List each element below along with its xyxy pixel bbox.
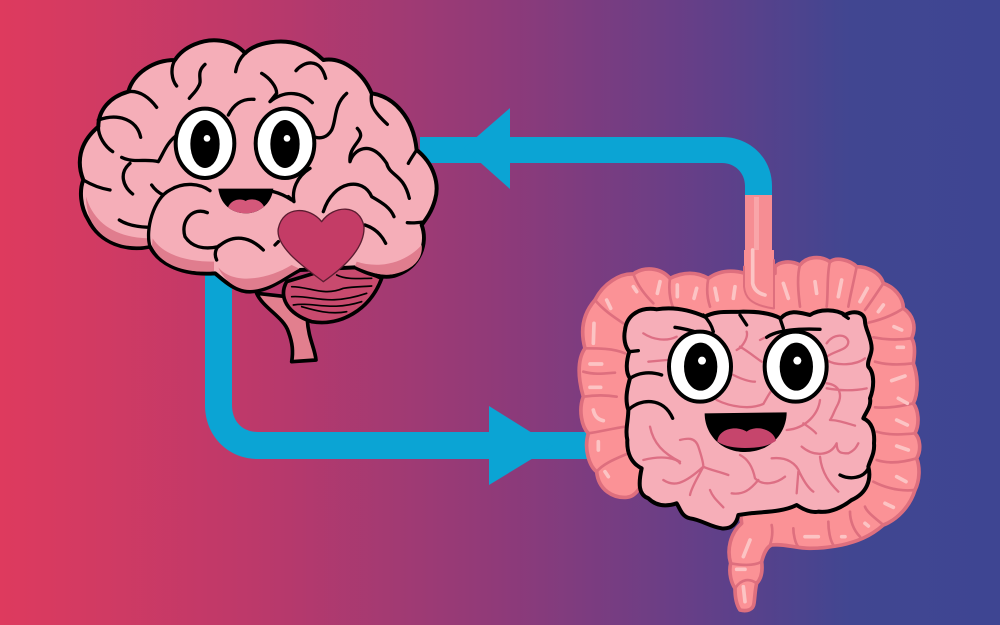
brain stem: [257, 293, 316, 362]
arrow: gut to brain: [420, 108, 772, 196]
cerebellum: [284, 263, 382, 323]
large intestine: [579, 258, 920, 611]
brain folds: [83, 53, 423, 260]
intestine character: [579, 250, 920, 611]
intestine mouth: [705, 412, 787, 452]
brain shadows: [86, 197, 422, 290]
arrow: brain to gut: [205, 270, 600, 485]
intestine right eye: [765, 332, 827, 402]
esophagus overlay: [744, 250, 774, 310]
colon highlights: [590, 280, 908, 602]
esophagus edge lines: [744, 260, 774, 308]
intestine folds: [643, 332, 867, 507]
small intestine: [624, 308, 874, 528]
brain left eye: [176, 109, 234, 178]
heart: [278, 209, 364, 282]
cerebrum outline: [80, 40, 437, 292]
brain right eye: [256, 109, 314, 178]
brain mouth: [218, 189, 273, 213]
brain character: [80, 40, 437, 362]
esophagus highlight: [753, 250, 765, 295]
black fold accents: [628, 315, 868, 478]
esophagus: [745, 195, 772, 305]
intestine left eye: [669, 332, 731, 402]
colon segment lines: [583, 262, 917, 588]
